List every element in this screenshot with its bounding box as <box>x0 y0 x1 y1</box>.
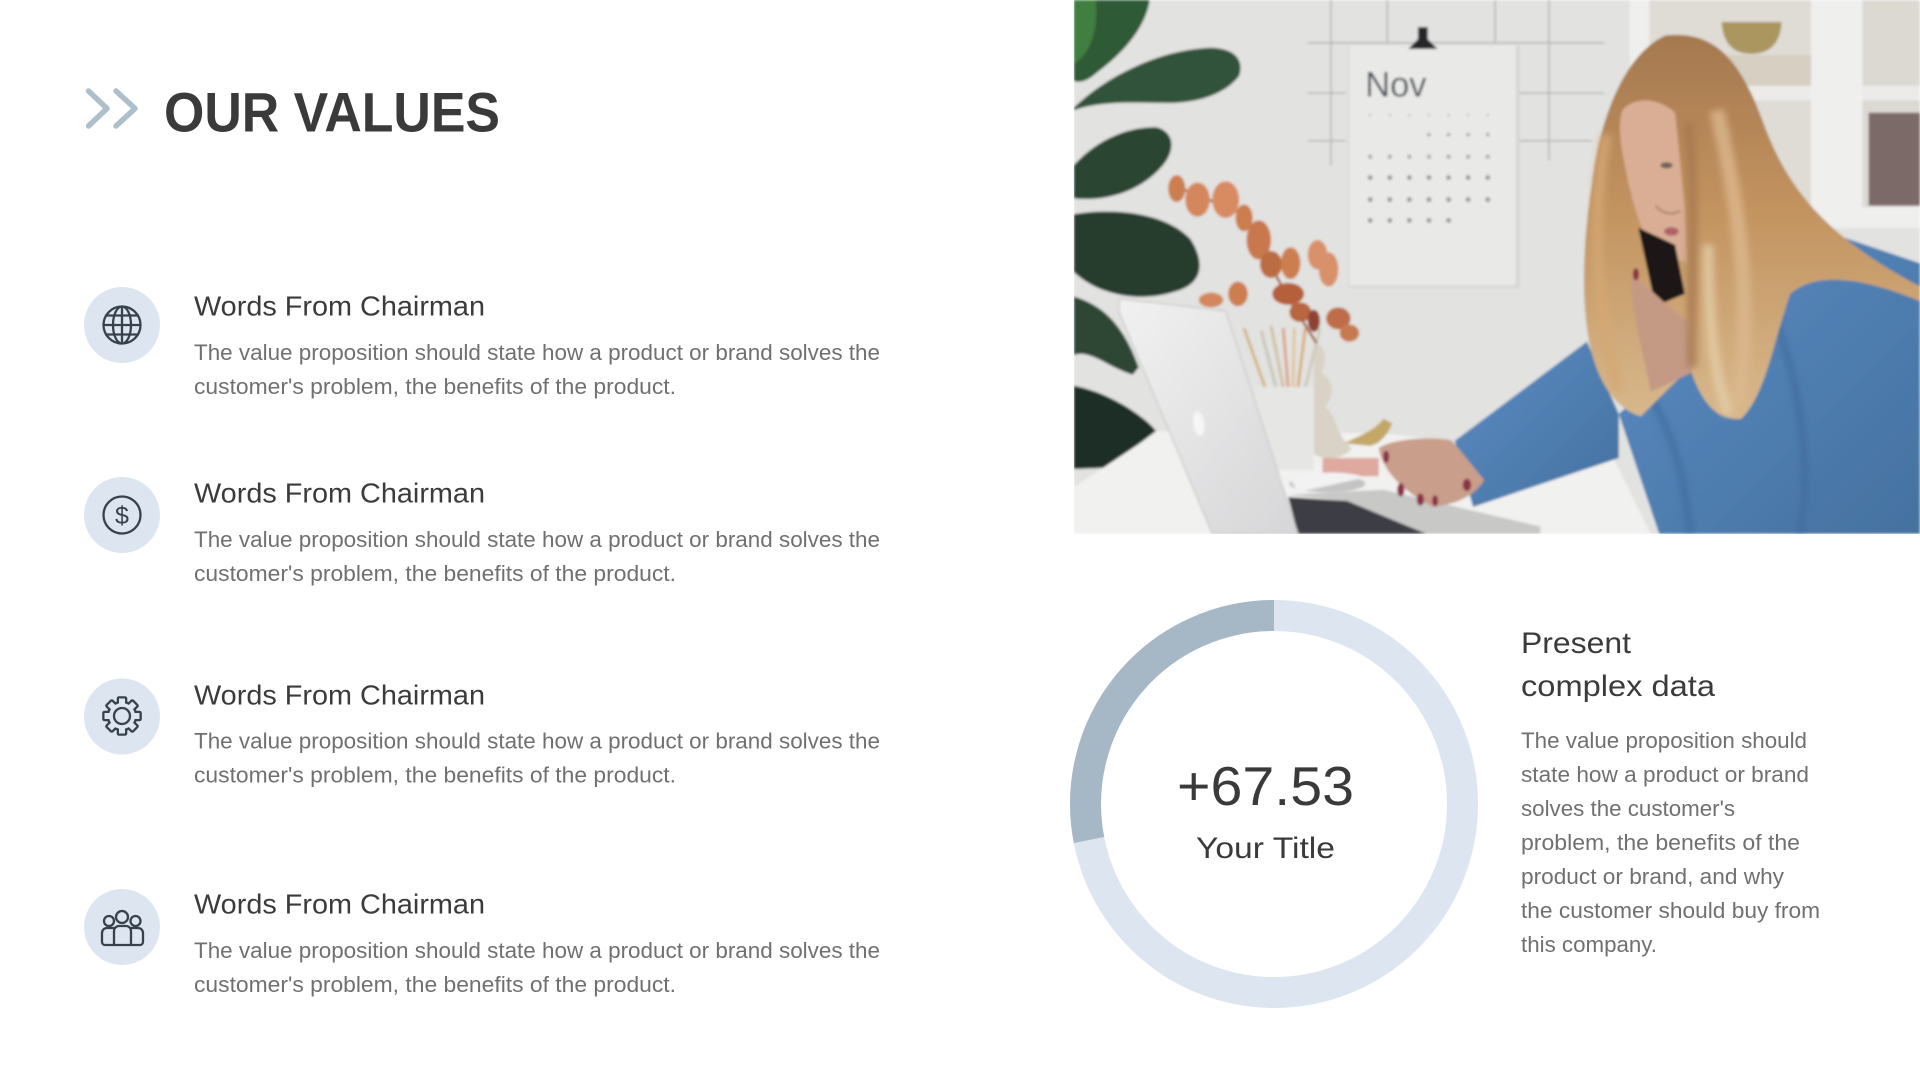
text block: The value proposition should state how a product or brand solves the <box>194 340 880 365</box>
heading: present complex data <box>1521 627 1715 703</box>
heading: present complex data: complex data <box>1521 670 1715 703</box>
desk <box>1074 431 1651 534</box>
photo: woman on phone at laptop <box>1074 0 1920 534</box>
heading: Words From Chairman <box>194 290 485 322</box>
keyboard hand <box>1379 438 1484 507</box>
text block: right description: this company. <box>1521 932 1657 957</box>
chart label: Your Title <box>1196 832 1335 865</box>
heading: Words From Chairman <box>194 478 485 508</box>
heading: Words From Chairman <box>194 888 485 920</box>
icon: double chevron <box>88 91 135 126</box>
pencil cup and vase <box>1244 326 1392 492</box>
calendar <box>1367 26 1519 287</box>
icon: dollar coin: $ <box>115 502 129 530</box>
panel: value item 1 <box>84 287 880 399</box>
hair back and sweater <box>1455 233 1920 534</box>
text block: customer's problem, the benefits of the product. <box>194 374 676 399</box>
text block: right description: problem, the benefits of the <box>1521 830 1800 855</box>
text block <box>194 527 880 586</box>
panel: value item 3 <box>84 678 880 788</box>
text block: customer's problem, the benefits of the product. <box>194 762 676 788</box>
icon: dollar coin <box>84 477 160 553</box>
icon: people group <box>84 889 160 965</box>
icon: gear <box>84 678 160 754</box>
text block: right description: state how a product or brand <box>1521 762 1809 787</box>
panel: value item 2 <box>84 477 880 586</box>
text block: customer's problem, the benefits of the product. <box>194 561 676 586</box>
text block: customer's problem, the benefits of the product. <box>194 972 676 997</box>
text block: right description: The value proposition should <box>1521 728 1807 753</box>
title: OUR VALUES <box>164 80 500 144</box>
donut chart <box>1086 616 1462 992</box>
plant leaves <box>1074 0 1241 469</box>
text block <box>194 340 880 399</box>
wall grid lines <box>1308 0 1604 165</box>
panel: value item 4 <box>84 888 880 997</box>
text block: The value proposition should state how a product or brand solves the <box>194 527 880 552</box>
hair <box>1584 35 1920 419</box>
text block <box>194 728 880 788</box>
text block: right description: product or brand, and why <box>1521 864 1784 889</box>
heading: Words From Chairman <box>194 680 485 710</box>
text block: right description: solves the customer's <box>1521 796 1735 821</box>
text block: The value proposition should state how a product or brand solves the <box>194 938 880 963</box>
text block <box>194 938 880 997</box>
chart value: +67.53 <box>1177 755 1354 817</box>
text block: The value proposition should state how a product or brand solves the <box>194 728 880 754</box>
laptop <box>1119 299 1540 534</box>
text block: right description: the customer should buy from <box>1521 898 1820 923</box>
face and phone <box>1597 100 1744 414</box>
icon: globe <box>84 287 160 363</box>
orange leaves <box>1168 175 1359 343</box>
heading: present complex data: Present <box>1521 627 1632 660</box>
calendar: Nov <box>1365 65 1427 105</box>
text block: right description <box>1521 728 1820 957</box>
cabinet <box>1630 0 1920 228</box>
